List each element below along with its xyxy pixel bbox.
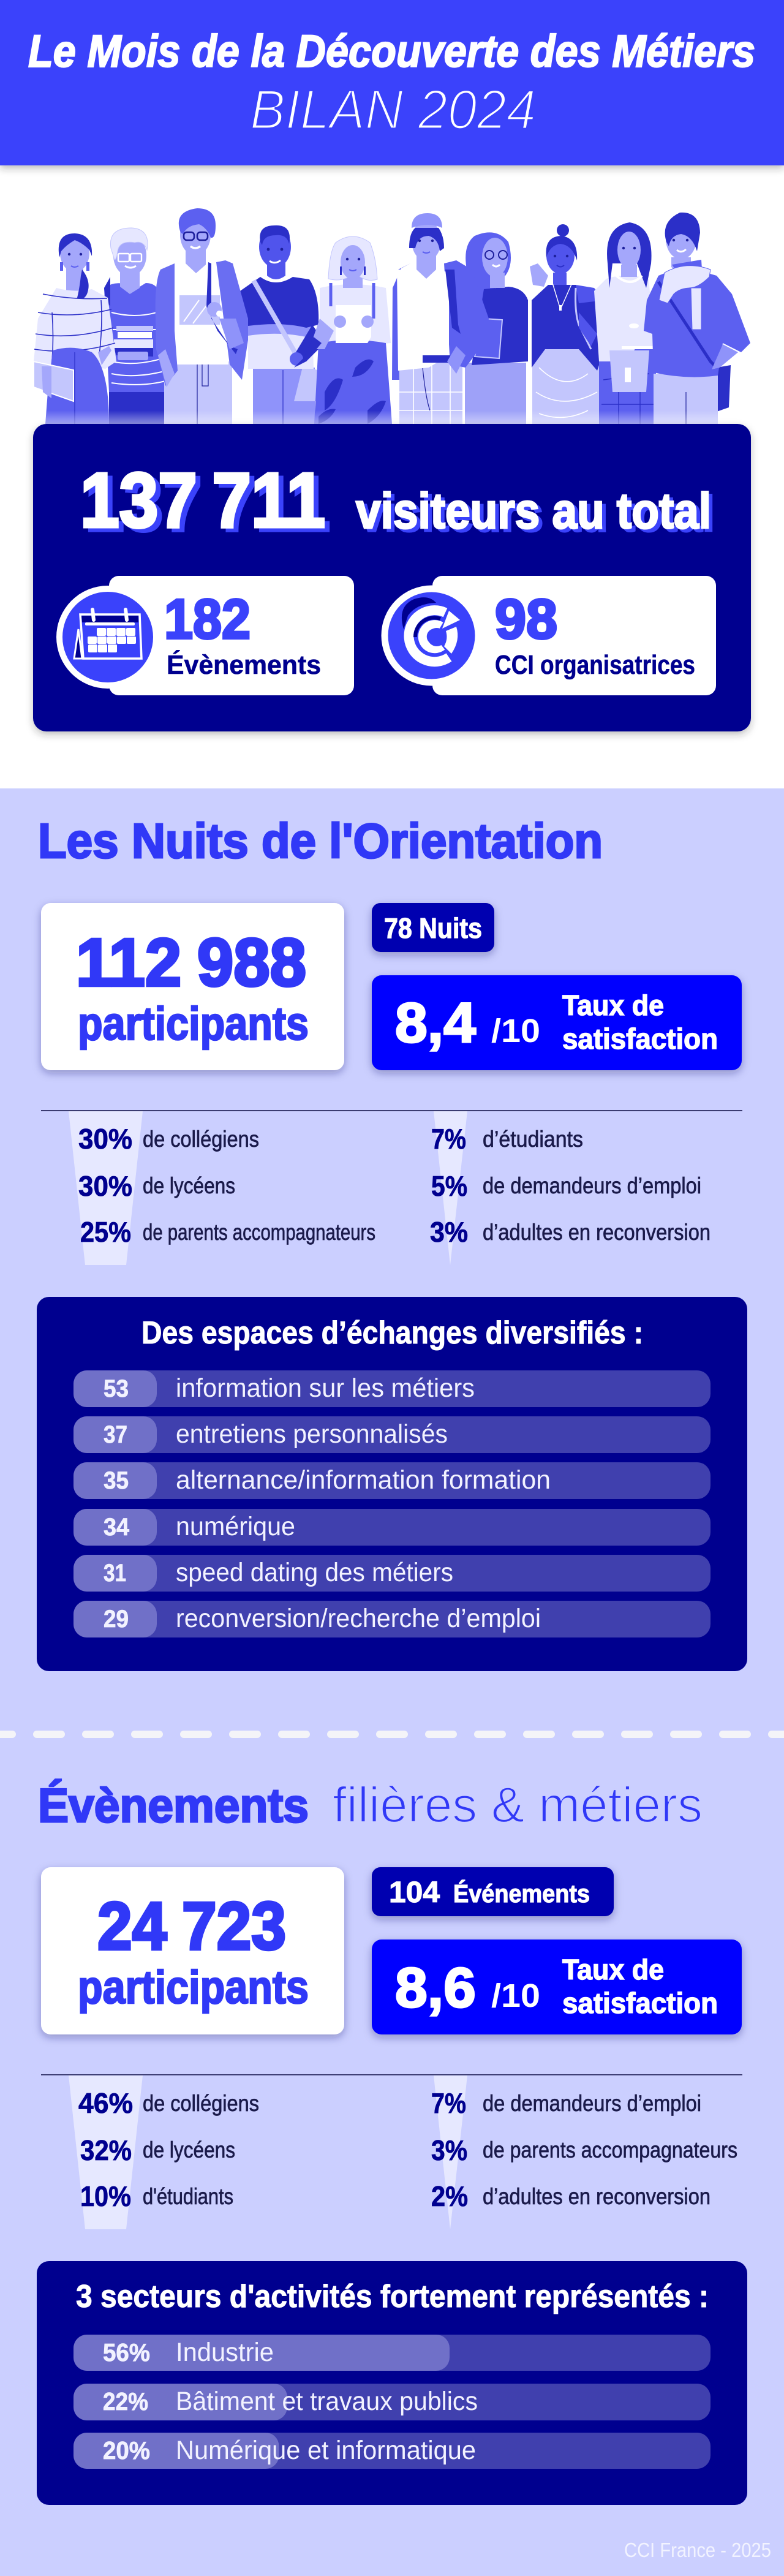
badge: 78 Nuits <box>372 903 494 952</box>
card: participants événements: 24 723 <box>97 1889 286 1964</box>
big number: 137 711 <box>80 457 325 543</box>
card: events <box>56 576 354 695</box>
left labels <box>143 2091 259 2209</box>
panel title: 3 secteurs d'activités fortement représentés : <box>76 2279 709 2314</box>
number: 98 <box>495 588 557 651</box>
heading: Évènements: Évènements <box>38 1778 309 1832</box>
row: speed dating: speed dating des métiers <box>176 1558 453 1587</box>
left percentages: 30% <box>78 1170 132 1202</box>
right percentages: 3% <box>431 2134 467 2166</box>
right labels <box>483 2091 737 2209</box>
label: Évènements <box>167 649 321 680</box>
row: alternance: alternance/information formation <box>176 1465 551 1495</box>
card: satisfaction événements: Taux de <box>562 1954 664 1985</box>
person 5: blonde, leaf skirt, paper <box>294 236 392 424</box>
right labels: d’adultes en reconversion <box>483 1220 710 1245</box>
card: satisfaction événements <box>372 1940 742 2034</box>
card: participants nuits: 112 988 <box>76 925 306 1000</box>
row: speed dating <box>74 1555 710 1592</box>
card: participants événements <box>41 1867 344 2034</box>
card: participants nuits <box>41 903 344 1070</box>
icon: calendar <box>74 610 141 659</box>
heading: filières & métiers: filières & métiers <box>333 1777 703 1833</box>
person 6: beanie, white tee, jacket, plaid trousers <box>392 213 489 424</box>
card: satisfaction événements: /10 <box>491 1977 540 2014</box>
bar: Numérique et informatique: 20% <box>103 2436 150 2465</box>
subtitle: BILAN 2024 <box>250 79 536 141</box>
number: 182 <box>164 588 251 651</box>
funnel left <box>69 1111 143 1265</box>
badge: 104 Événements <box>372 1867 614 1916</box>
bar: Industrie <box>74 2335 710 2371</box>
right percentages <box>431 2087 468 2212</box>
person 3: curly hair, glasses, white tee, cardigan <box>156 208 248 424</box>
right labels: de demandeurs d’emploi <box>483 2091 701 2116</box>
row: information sur les métiers: 53 <box>104 1375 129 1402</box>
card: satisfaction événements: 8,6 <box>395 1957 476 2019</box>
left percentages <box>78 1123 132 1248</box>
card: satisfaction nuits: Taux de <box>562 989 664 1021</box>
right labels: d’adultes en reconversion <box>483 2184 710 2209</box>
illustration: group of ten young people <box>34 208 750 424</box>
bar: Bâtiment et travaux publics: 22% <box>103 2387 148 2415</box>
left percentages: 30% <box>78 1123 132 1155</box>
panel: espaces d'échanges <box>37 1297 747 1671</box>
person 10: scarf, sweater, shoulder bag <box>644 213 750 424</box>
left labels: de lycéens <box>143 1173 235 1198</box>
bar: Numérique et informatique: Numérique et informatique <box>176 2436 476 2465</box>
icon: target <box>402 597 460 662</box>
row: numérique: numérique <box>176 1512 295 1541</box>
row: numérique: 34 <box>104 1514 130 1541</box>
person 8: bun, necklace, skirt <box>530 224 606 424</box>
row: entretiens personnalisés <box>74 1416 710 1453</box>
person 9: long hair, laptop <box>594 222 674 424</box>
panel title: Des espaces d’échanges diversifiés : <box>141 1315 643 1351</box>
panel: total visitors <box>33 424 751 731</box>
row: entretiens personnalisés: 37 <box>104 1421 127 1448</box>
header banner <box>0 0 784 165</box>
big number shadow: 137 711 <box>85 461 330 547</box>
row: numérique <box>74 1509 710 1546</box>
row: reconversion: 29 <box>104 1606 129 1633</box>
badge: 104 Événements: 104 <box>389 1876 440 1909</box>
card: participants événements: participants <box>78 1962 309 2014</box>
heading: Les Nuits de l'Orientation: Les Nuits de l'Orientation <box>38 814 603 868</box>
row: information sur les métiers <box>74 1370 710 1407</box>
left labels: de collégiens <box>143 2091 259 2116</box>
panel: secteurs d'activités <box>37 2261 747 2505</box>
bar: Bâtiment et travaux publics: Bâtiment et travaux publics <box>176 2387 478 2416</box>
bar: Industrie: Industrie <box>176 2338 274 2367</box>
row: speed dating: 31 <box>104 1560 126 1587</box>
badge: 104 Événements: Événements <box>453 1879 590 1908</box>
left labels: d'étudiants <box>143 2184 233 2209</box>
right percentages: 5% <box>431 1170 467 1202</box>
profile block: événements <box>41 2074 742 2229</box>
left labels: de parents accompagnateurs <box>143 1220 375 1245</box>
card: satisfaction nuits <box>372 975 742 1070</box>
card: satisfaction nuits: satisfaction <box>562 1022 718 1055</box>
left percentages: 32% <box>80 2134 132 2166</box>
row: entretiens personnalisés: entretiens personnalisés <box>176 1419 448 1449</box>
left percentages <box>78 2087 133 2212</box>
left percentages: 10% <box>80 2180 131 2212</box>
badge: 78 Nuits: 78 Nuits <box>384 912 482 944</box>
left labels <box>143 1127 375 1245</box>
right labels: de demandeurs d’emploi <box>483 1173 701 1198</box>
funnel right <box>434 2076 467 2229</box>
card: participants nuits: participants <box>78 998 309 1050</box>
label shadow: visiteurs au total <box>360 486 715 542</box>
profile block: nuits <box>41 1110 742 1265</box>
row: alternance <box>74 1462 710 1499</box>
left labels: de lycéens <box>143 2137 235 2162</box>
card: satisfaction événements: satisfaction <box>562 1987 718 2019</box>
right percentages: 3% <box>430 1216 468 1248</box>
person 2: white hair, striped shirt <box>104 228 166 424</box>
row: reconversion: reconversion/recherche d’emploi <box>176 1604 541 1633</box>
page background: white top area <box>0 0 784 788</box>
left percentages: 46% <box>78 2087 133 2119</box>
person 4: dark tee, crossbody bag <box>240 225 325 424</box>
right percentages <box>430 1123 468 1248</box>
right labels: de parents accompagnateurs <box>483 2137 737 2162</box>
right labels <box>483 1127 710 1245</box>
right percentages: 2% <box>431 2180 468 2212</box>
label: CCI organisatrices <box>495 650 695 680</box>
left labels: de collégiens <box>143 1127 259 1152</box>
row: information sur les métiers: information sur les métiers <box>176 1373 475 1403</box>
funnel left <box>69 2076 143 2229</box>
row: alternance: 35 <box>104 1467 129 1494</box>
card: organising CCI <box>381 576 716 695</box>
funnel right <box>434 1111 467 1265</box>
right percentages: 7% <box>431 1123 466 1155</box>
section background: lavender <box>0 788 784 2576</box>
row: reconversion <box>74 1601 710 1637</box>
bar: Bâtiment et travaux publics <box>74 2384 710 2420</box>
right percentages: 7% <box>431 2087 466 2119</box>
right labels: d’étudiants <box>483 1127 583 1152</box>
label: visiteurs au total <box>356 483 711 539</box>
card: satisfaction nuits: 8,4 <box>395 992 476 1054</box>
person 7: long hair, round glasses, dark top <box>465 232 528 424</box>
left percentages: 25% <box>80 1216 131 1248</box>
bar: Industrie: 56% <box>103 2338 150 2366</box>
card: satisfaction nuits: /10 <box>491 1013 540 1049</box>
person 1: striped sweater, ponytail <box>34 233 116 424</box>
bar: Numérique et informatique <box>74 2433 710 2469</box>
